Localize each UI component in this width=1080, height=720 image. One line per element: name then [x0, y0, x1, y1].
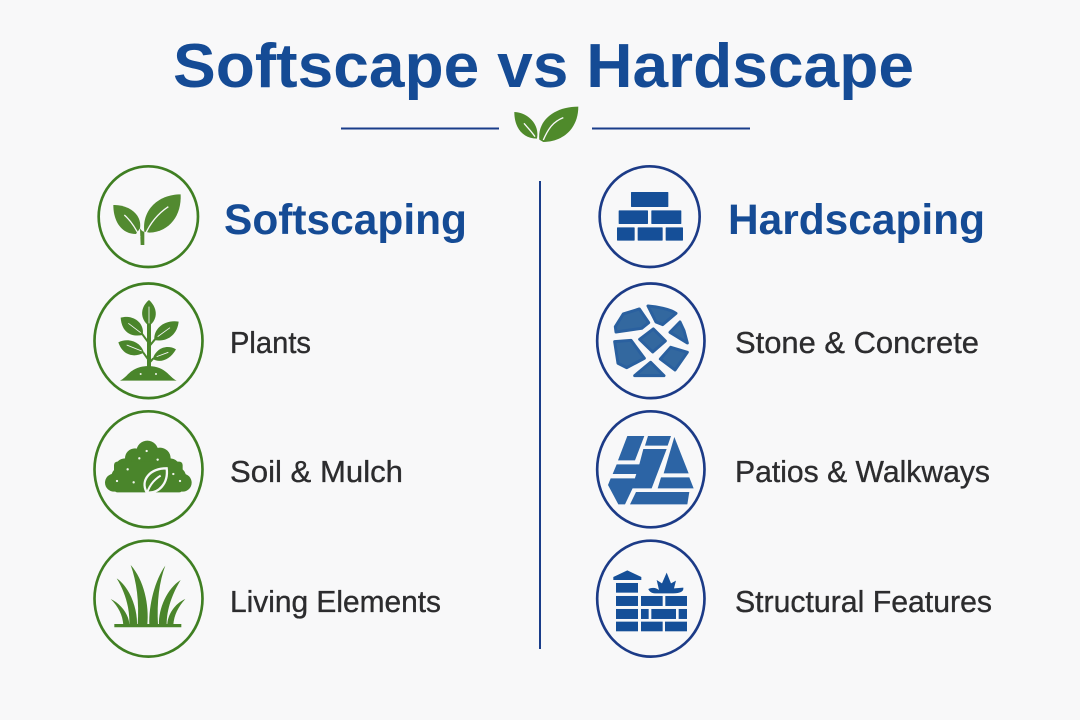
label: Living Elements: Living Elements [230, 584, 441, 619]
heading: Softscaping: Softscaping [224, 196, 467, 244]
icon: stones [597, 283, 704, 398]
icon: two leaves in circle [99, 166, 198, 267]
icon: soil mound [94, 411, 202, 527]
label: Structural Features: Structural Features [735, 584, 992, 619]
title ornament: lines and leaves [341, 107, 750, 142]
label: Patios & Walkways: Patios & Walkways [735, 454, 990, 489]
icon: plant [94, 283, 202, 398]
title: Softscape vs Hardscape [173, 32, 914, 101]
icon: bricks [600, 166, 700, 267]
label: Plants: Plants [230, 325, 311, 360]
label: Soil & Mulch: Soil & Mulch [230, 454, 403, 489]
icon: paving [597, 411, 704, 527]
vertical divider [539, 181, 541, 649]
panel: softscaping [94, 166, 467, 657]
label: Stone & Concrete: Stone & Concrete [735, 325, 979, 360]
icon: grass [94, 541, 202, 657]
icon: wall and pillar [597, 541, 704, 657]
heading: Hardscaping: Hardscaping [728, 196, 985, 244]
panel: hardscaping [597, 166, 992, 657]
